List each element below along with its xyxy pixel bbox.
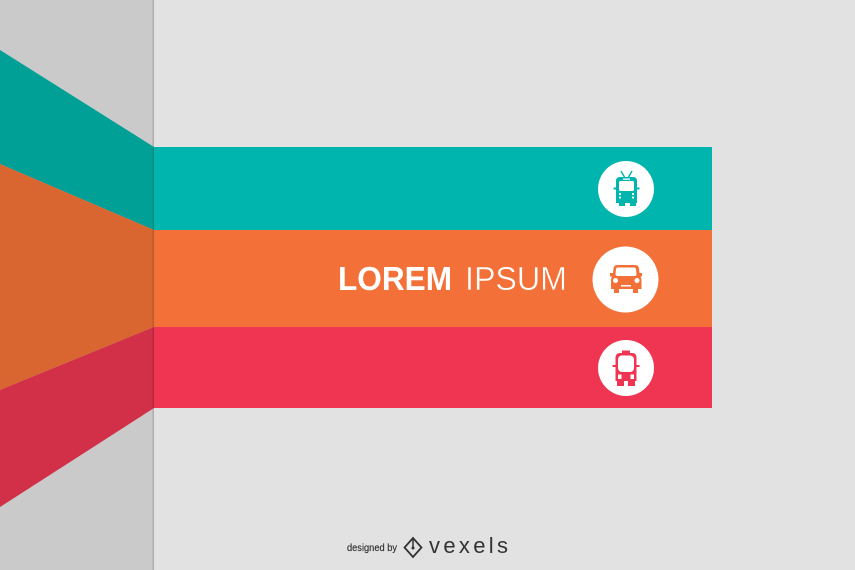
panel: left grey wall [0,0,154,570]
ribbon: teal perspective [0,50,154,230]
heading: IPSUM [465,260,567,297]
ribbon: red perspective [0,327,154,507]
banner: orange [154,230,712,327]
heading: LOREM [338,260,452,297]
footer: designed by vexels logo [347,533,508,558]
left perspective ribbons [0,50,154,507]
wordmark: vexels [429,533,508,558]
right banners [154,147,712,408]
ribbon: orange perspective [0,164,154,390]
icon: car [592,246,658,312]
banner: red [154,327,712,408]
icon: trolleybus [598,161,654,217]
icon: vexels diamond [404,538,422,557]
heading [338,260,567,297]
credit text: designed by [347,542,398,554]
icon: bus [598,340,654,396]
banner: teal [154,147,712,230]
